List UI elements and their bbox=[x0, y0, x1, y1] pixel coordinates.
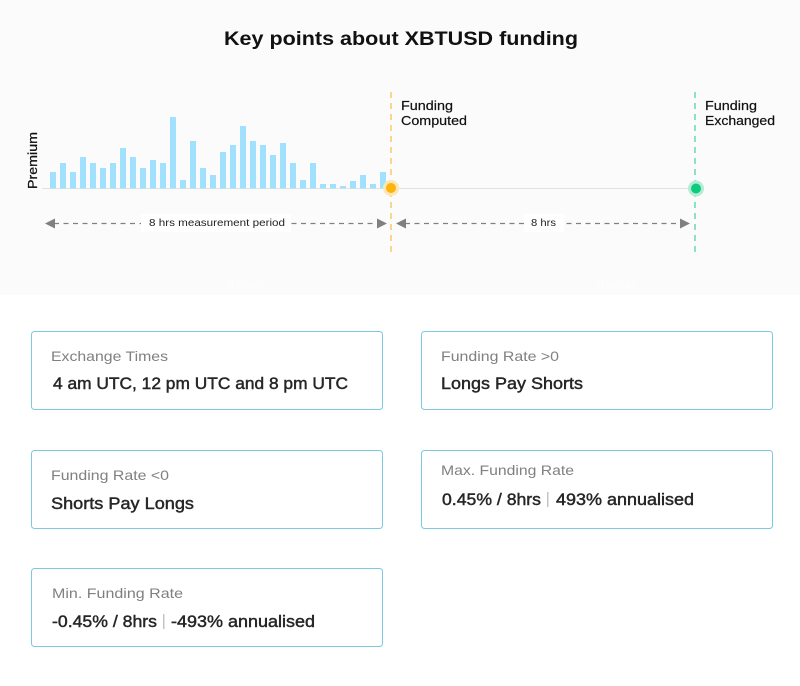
card: funding rate above zero: Funding Rate >0 bbox=[441, 348, 559, 364]
card: funding rate below zero bbox=[32, 450, 382, 528]
label: funding exchanged: Exchanged bbox=[705, 114, 775, 128]
bar chart: premium bbox=[50, 117, 386, 188]
arrow: 8 hrs bbox=[396, 214, 690, 232]
card: min funding rate: -493% annualised bbox=[171, 613, 315, 631]
card: funding rate above zero bbox=[422, 332, 772, 410]
arrow: 8 hrs measurement period: 8 hrs measurement period bbox=[149, 217, 285, 229]
card: min funding rate: -0.45% / 8hrs bbox=[52, 613, 157, 631]
card: exchange times: 4 am UTC, 12 pm UTC and 8 pm UTC bbox=[53, 375, 348, 393]
label: funding exchanged: Funding bbox=[705, 99, 757, 113]
panel: funding timeline bbox=[0, 0, 800, 295]
arrow: 8 hrs measurement period bbox=[45, 214, 387, 232]
card: exchange times bbox=[32, 332, 382, 410]
marker line: funding exchanged bbox=[694, 92, 696, 252]
card: exchange times: Exchange Times bbox=[51, 348, 168, 364]
axis line bbox=[42, 188, 696, 190]
faint watermark labels: 8 hours bbox=[227, 278, 267, 292]
label: funding exchanged bbox=[705, 99, 775, 128]
arrow: 8 hrs: 8 hrs bbox=[531, 217, 556, 229]
dot: funding computed bbox=[383, 180, 399, 196]
faint watermark labels bbox=[227, 278, 637, 292]
label: funding computed bbox=[401, 99, 467, 128]
card: max funding rate: Max. Funding Rate bbox=[441, 462, 574, 478]
card: min funding rate: Min. Funding Rate bbox=[52, 585, 183, 601]
label: funding computed: Funding bbox=[401, 99, 453, 113]
card: funding rate below zero: Funding Rate <0 bbox=[51, 467, 169, 483]
card: funding rate below zero: Shorts Pay Longs bbox=[51, 495, 194, 513]
card: funding rate above zero: Longs Pay Shorts bbox=[441, 375, 583, 393]
card: max funding rate: 0.45% / 8hrs bbox=[442, 491, 541, 509]
title: Key points about XBTUSD funding bbox=[224, 29, 578, 50]
dot: funding exchanged bbox=[688, 180, 704, 196]
card: min funding rate bbox=[32, 568, 382, 646]
card: max funding rate: 493% annualised bbox=[556, 491, 694, 509]
axis label: premium: Premium bbox=[26, 132, 40, 189]
card: max funding rate bbox=[422, 450, 772, 528]
label: funding computed: Computed bbox=[401, 114, 467, 128]
faint watermark labels: 8 hours bbox=[597, 278, 637, 292]
marker line: funding computed bbox=[390, 92, 392, 252]
